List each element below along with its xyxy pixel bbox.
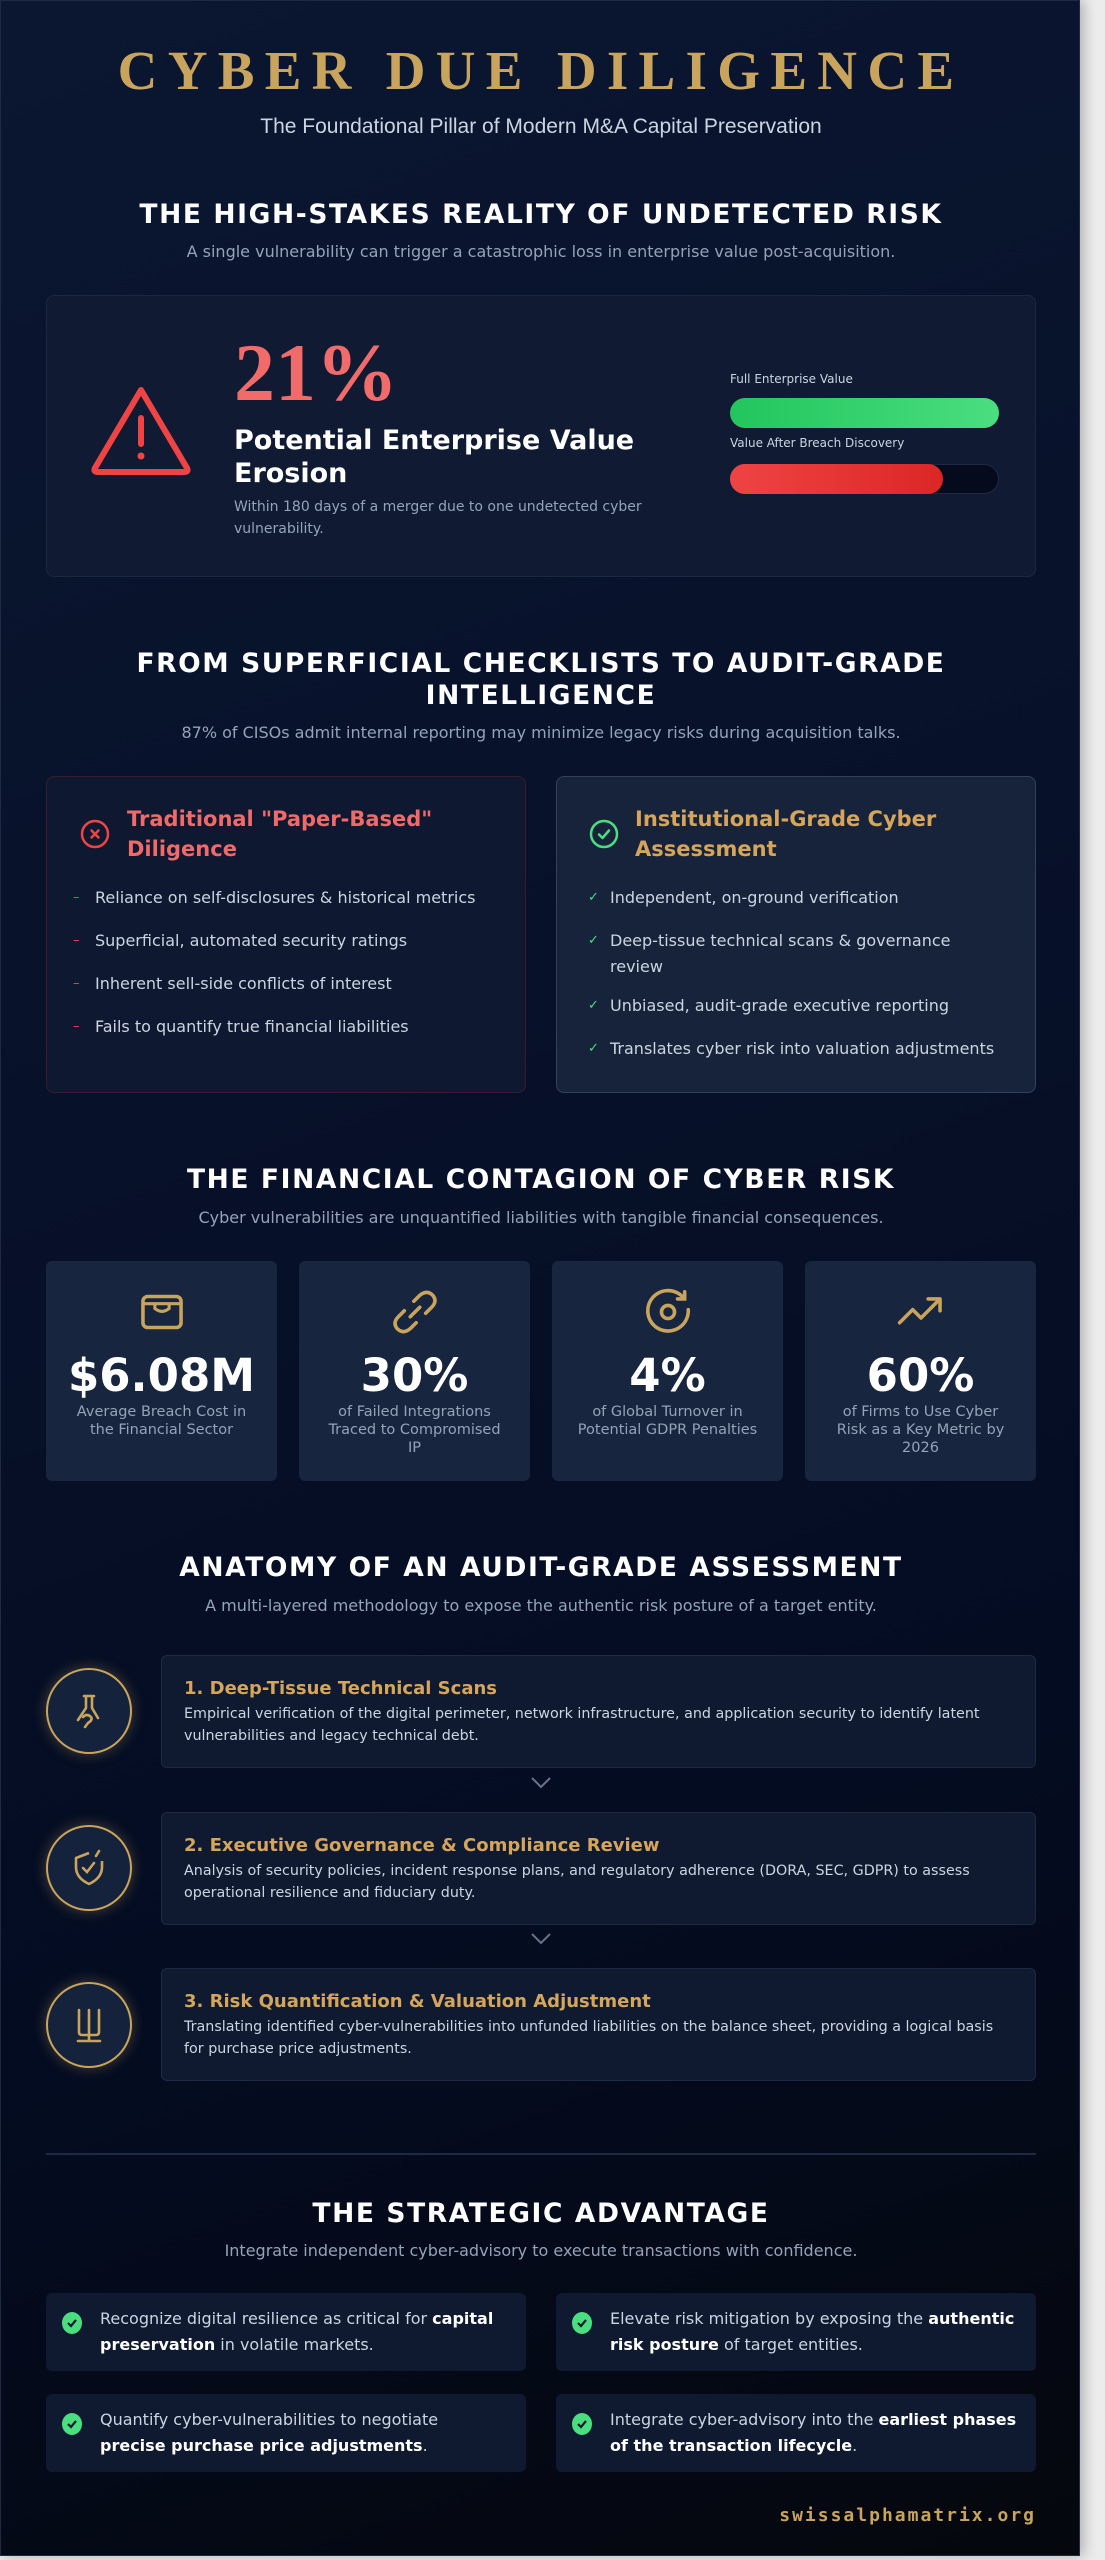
card title: Institutional-Grade Cyber Assessment <box>635 807 936 861</box>
list: institutional points: ✓ <box>588 998 599 1013</box>
chart: value bars: Value After Breach Discovery <box>730 436 904 450</box>
benefit 3: precise purchase price adjustments. <box>100 2436 428 2455</box>
stat card: breach cost: Average Breach Cost in the Financial Sector <box>77 1404 246 1438</box>
list: institutional points: ✓ <box>588 890 599 905</box>
step 2 card <box>161 1812 1036 1925</box>
icon: trend up <box>898 1297 942 1325</box>
panel: traditional diligence <box>46 776 526 1093</box>
panel: institutional assessment <box>556 776 1036 1093</box>
heading: strategic advantage: THE STRATEGIC ADVANTAGE <box>312 2198 770 2229</box>
stat card: breach cost: $6.08M <box>68 1349 255 1402</box>
list: institutional points: Translates cyber risk into valuation adjustments <box>610 1039 994 1058</box>
heading: checklists: INTELLIGENCE <box>426 680 656 711</box>
stat card: GDPR: 4% <box>629 1349 706 1402</box>
benefit 1 <box>46 2293 526 2371</box>
stat card: key metric <box>805 1261 1036 1481</box>
step 3 card <box>161 1968 1036 2081</box>
stat card: failed integrations: of Failed Integrations Traced to Compromised IP <box>328 1404 501 1456</box>
stat card: GDPR <box>552 1261 783 1481</box>
stat card: failed integrations <box>299 1261 530 1481</box>
step icon 3: scales <box>46 1982 132 2068</box>
text: erosion label: Potential Enterprise Value Erosion <box>234 425 634 489</box>
list: institutional points: Deep-tissue technical scans & governance review <box>610 931 951 976</box>
stat: 21%: 21% <box>234 327 398 418</box>
step 2 card: Analysis of security policies, incident response plans, and regulatory adherence (DORA, SEC, GDPR) to assess operational resilience and fiduciary duty. <box>184 1863 970 1901</box>
step 1 card <box>161 1655 1036 1768</box>
panel: value erosion <box>46 295 1036 577</box>
list: institutional points: ✓ <box>588 933 599 948</box>
benefit 1: Recognize digital resilience as critical for capital preservation in volatile markets. <box>100 2309 493 2354</box>
icon: gear circle <box>646 1288 690 1333</box>
step 1 card: 1. Deep-Tissue Technical Scans <box>184 1678 497 1699</box>
list: traditional points: Inherent sell-side conflicts of interest <box>95 974 392 993</box>
subheading: contagion: Cyber vulnerabilities are unquantified liabilities with tangible financial consequences. <box>198 1208 884 1227</box>
icon: x circle <box>80 820 110 848</box>
stat card: key metric: of Firms to Use Cyber Risk as a Key Metric by 2026 <box>837 1404 1004 1456</box>
benefit 2: Elevate risk mitigation by exposing the authentic risk posture of target entities. <box>610 2309 1014 2354</box>
heading: checklists <box>136 648 946 711</box>
subheading: high-stakes: A single vulnerability can trigger a catastrophic loss in enterprise value post-acquisition. <box>187 242 895 261</box>
icon: warning triangle <box>91 387 191 475</box>
step 3 card: Translating identified cyber-vulnerabilities into unfunded liabilities on the balance sheet, providing a logical basis for purchase price adjustments. <box>184 2019 993 2057</box>
list: traditional points: – <box>73 933 80 948</box>
subheading: strategic advantage: Integrate independent cyber-advisory to execute transactions with confidence. <box>225 2241 857 2260</box>
subheading: anatomy: A multi-layered methodology to expose the authentic risk posture of a target entity. <box>205 1596 877 1615</box>
title: CYBER DUE DILIGENCE <box>118 40 964 101</box>
step 3 card: 3. Risk Quantification & Valuation Adjustment <box>184 1991 651 2012</box>
heading: high-stakes: THE HIGH-STAKES REALITY OF UNDETECTED RISK <box>139 199 943 230</box>
step 2 card: 2. Executive Governance & Compliance Review <box>184 1835 660 1856</box>
step 1 card: Empirical verification of the digital perimeter, network infrastructure, and application security to identify latent vulnerabilities and legacy technical debt. <box>184 1706 980 1744</box>
list: traditional points <box>73 888 475 1036</box>
arrow: chevron 1 <box>531 1777 551 1788</box>
heading: anatomy: ANATOMY OF AN AUDIT-GRADE ASSESSMENT <box>179 1552 903 1583</box>
icon: wallet <box>141 1294 183 1330</box>
benefit 3: Quantify cyber-vulnerabilities to negotiate <box>100 2410 438 2429</box>
chart: value bars <box>730 372 999 494</box>
card title: Traditional "Paper-Based" Diligence <box>127 807 432 861</box>
list: institutional points: Independent, on-ground verification <box>610 888 899 907</box>
list: traditional points: – <box>73 976 80 991</box>
icon: link <box>393 1290 437 1334</box>
step icon 2: shield <box>46 1825 132 1911</box>
benefit 3 <box>46 2394 526 2472</box>
list: institutional points <box>588 888 994 1058</box>
footer: website: swissalphamatrix.org <box>779 2505 1036 2526</box>
list: traditional points: Fails to quantify true financial liabilities <box>95 1017 409 1036</box>
step icon 1: flask <box>46 1668 132 1754</box>
divider <box>46 2153 1036 2155</box>
stat card: failed integrations: 30% <box>361 1349 468 1402</box>
benefit 2 <box>556 2293 1036 2371</box>
heading: checklists: FROM SUPERFICIAL CHECKLISTS TO AUDIT-GRADE <box>136 648 946 679</box>
benefit 4: Integrate cyber-advisory into the earliest phases of the transaction lifecycle. <box>610 2410 1016 2455</box>
stat card: key metric: 60% <box>867 1349 974 1402</box>
arrow: chevron 2 <box>531 1933 551 1944</box>
stat card: breach cost <box>46 1261 277 1481</box>
subtitle: The Foundational Pillar of Modern M&A Capital Preservation <box>260 115 822 138</box>
chart: value bars: Full Enterprise Value <box>730 372 853 386</box>
icon: check circle <box>590 820 618 848</box>
list: traditional points: – <box>73 890 80 905</box>
list: institutional points: Unbiased, audit-grade executive reporting <box>610 996 949 1015</box>
list: traditional points: Reliance on self-disclosures & historical metrics <box>95 888 475 907</box>
list: traditional points: Superficial, automated security ratings <box>95 931 407 950</box>
benefit 4 <box>556 2394 1036 2472</box>
list: institutional points: ✓ <box>588 1041 599 1056</box>
heading: contagion: THE FINANCIAL CONTAGION OF CYBER RISK <box>187 1164 895 1195</box>
text: erosion note: Within 180 days of a merger due to one undetected cyber vulnerability. <box>234 499 642 537</box>
subheading: checklists: 87% of CISOs admit internal reporting may minimize legacy risks during acquisition talks. <box>181 723 901 742</box>
stat card: GDPR: of Global Turnover in Potential GDPR Penalties <box>578 1404 757 1438</box>
list: traditional points: – <box>73 1019 80 1034</box>
